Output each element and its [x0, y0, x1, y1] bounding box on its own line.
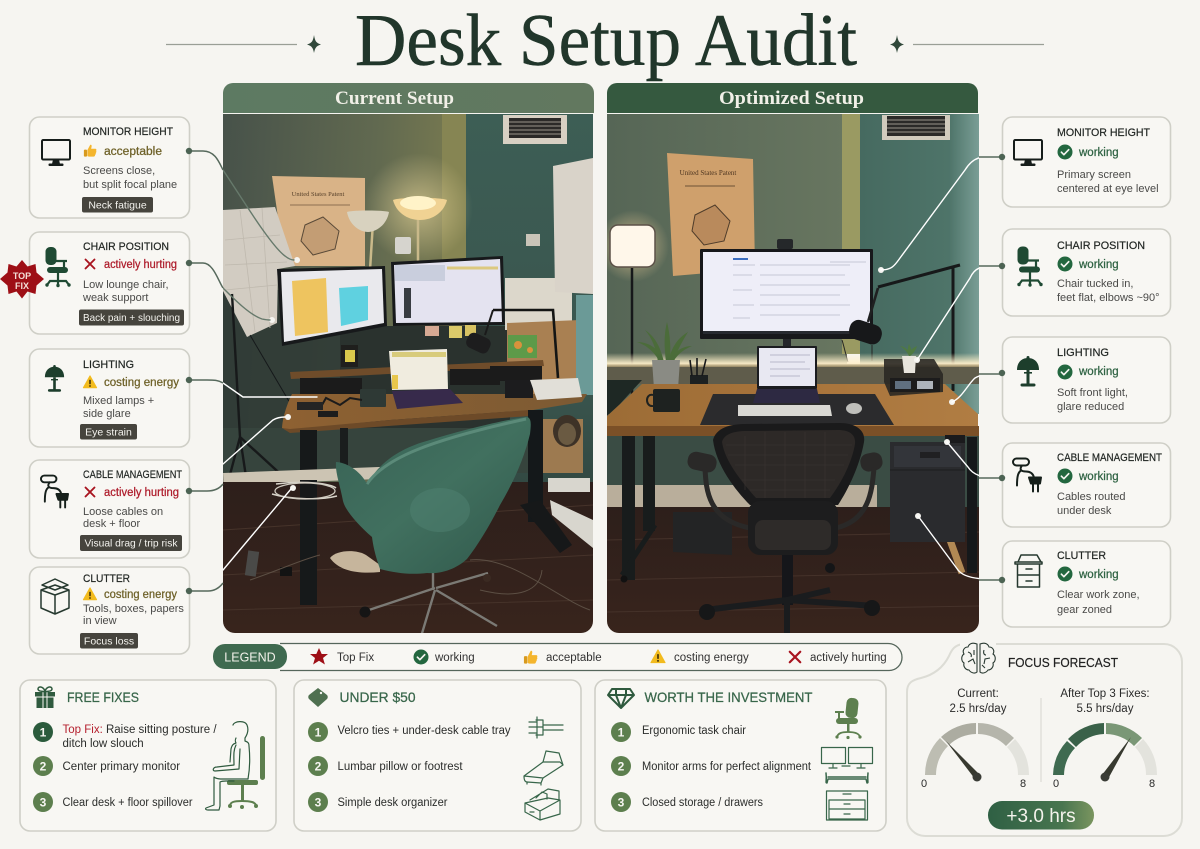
- step 3: [308, 792, 448, 812]
- panel: optimized chair position: [1002, 229, 1170, 316]
- legend: [213, 644, 902, 670]
- legend item: acceptable: [524, 651, 602, 664]
- legend item: working: working: [434, 652, 475, 664]
- panel: optimized setup header: Optimized Setup: [719, 88, 864, 109]
- icon: lamp: [1017, 356, 1039, 386]
- panel: current monitor height: but split focal plane: [83, 179, 177, 191]
- gauge: after top 3 fixes: After Top 3 Fixes:: [1060, 688, 1150, 700]
- step 1: Velcro ties + under-desk cable tray: [338, 725, 511, 737]
- step 2: 2: [618, 760, 625, 774]
- title ornament: left: [166, 35, 321, 53]
- legend item: acceptable: acceptable: [546, 652, 602, 664]
- panel: optimized monitor height: centered at eye level: [1057, 183, 1159, 195]
- panel: current lighting: costing energy: [104, 377, 179, 389]
- gauge: current: 0: [921, 778, 927, 790]
- panel: current cable management: CABLE MANAGEMENT: [83, 469, 182, 481]
- step 2: [33, 756, 180, 776]
- panel: under $50: UNDER $50: [340, 689, 416, 705]
- panel: optimized setup header: [607, 83, 978, 113]
- icon: open box: [41, 579, 69, 614]
- panel: current monitor height: acceptable: [104, 146, 162, 158]
- panel: focus forecast: FOCUS FORECAST: [1008, 656, 1118, 670]
- icon: check: [1058, 256, 1072, 272]
- gauge: current: Current:: [957, 688, 999, 700]
- step 3: Simple desk organizer: [338, 797, 448, 809]
- result pill: [988, 801, 1094, 830]
- panel: current lighting: Mixed lamps +: [83, 395, 154, 407]
- gauge: current: [921, 688, 1029, 790]
- panel: current monitor height: MONITOR HEIGHT: [83, 126, 173, 138]
- panel: current clutter: Tools, boxes, papers: [83, 603, 184, 615]
- panel: optimized clutter: gear zoned: [1057, 604, 1112, 616]
- panel: optimized clutter: [1002, 541, 1170, 627]
- icon: check: [1058, 364, 1072, 380]
- legend item: working: [414, 650, 475, 664]
- panel: current lighting: [30, 349, 190, 447]
- icon: diamond: [608, 689, 634, 708]
- panel: current clutter: [30, 567, 190, 654]
- icon: chair: [45, 247, 71, 287]
- panel: optimized monitor height: Primary screen: [1057, 169, 1131, 181]
- step 1: Top Fix: Raise sitting posture /: [62, 724, 217, 736]
- icon: monitor: [1014, 140, 1042, 166]
- panel: current lighting: LIGHTING: [83, 359, 134, 371]
- panel: worth the investment: WORTH THE INVESTMENT: [644, 689, 813, 705]
- step 1: 1: [315, 726, 322, 740]
- title ornament: right: [890, 35, 1044, 53]
- panel: optimized lighting: glare reduced: [1057, 401, 1124, 413]
- step 1: 1: [40, 726, 47, 740]
- icon: thumbs up: [84, 145, 96, 157]
- photo: optimized setup: [597, 114, 985, 640]
- panel: optimized cable management: CABLE MANAGEMENT: [1057, 452, 1162, 464]
- panel: optimized clutter: CLUTTER: [1057, 550, 1106, 562]
- panel: optimized chair position: CHAIR POSITION: [1057, 240, 1145, 252]
- panel: focus forecast: [907, 640, 1182, 836]
- tag: back pain: Back pain + slouching: [83, 312, 180, 324]
- panel: optimized chair position: feet flat, elbows ~90°: [1057, 292, 1160, 304]
- panel: current setup header: Current Setup: [335, 88, 454, 109]
- icon: monitor: [42, 140, 70, 166]
- tag: visual drag: Visual drag / trip risk: [84, 538, 178, 550]
- gauge: after top 3 fixes: 8: [1149, 778, 1155, 790]
- panel: under $50: [294, 680, 581, 831]
- icon: drawer cabinet: [826, 791, 868, 820]
- step 1: ditch low slouch: [62, 738, 144, 750]
- badge: top fix: FIX: [15, 281, 29, 291]
- tag: neck fatigue: Neck fatigue: [88, 200, 147, 212]
- icon: check: [1058, 468, 1072, 484]
- tag: neck fatigue: [82, 197, 153, 212]
- step 3: 3: [40, 796, 47, 810]
- icon: warning: [83, 588, 97, 600]
- icon: cables: [41, 476, 68, 507]
- panel: current chair position: Low lounge chair,: [83, 279, 169, 291]
- photo: current setup: [223, 114, 593, 640]
- legend label: [213, 644, 287, 669]
- step 3: 3: [618, 796, 625, 810]
- step 1: [611, 722, 746, 742]
- panel: free fixes: FREE FIXES: [67, 689, 139, 705]
- tag: eye strain: Eye strain: [85, 426, 132, 438]
- step 2: Lumbar pillow or footrest: [338, 761, 463, 773]
- tag: focus loss: [80, 633, 138, 648]
- icon: lamp: [45, 365, 64, 392]
- legend item: top fix: Top Fix: [337, 652, 374, 664]
- icon: brain: [962, 643, 995, 673]
- panel: optimized lighting: Soft front light,: [1057, 387, 1128, 399]
- panel: optimized chair position: working: [1078, 259, 1119, 271]
- panel: optimized monitor height: MONITOR HEIGHT: [1057, 127, 1150, 139]
- tag: focus loss: Focus loss: [84, 636, 134, 648]
- photo: optimized setup: United States Patent: [680, 169, 736, 177]
- gauge: after top 3 fixes: 0: [1053, 778, 1059, 790]
- icon: green chair: [835, 697, 862, 739]
- title: Desk Setup Audit: [355, 0, 857, 82]
- panel: current lighting: side glare: [83, 408, 131, 420]
- panel: optimized lighting: working: [1078, 366, 1119, 378]
- step 1: 1: [618, 726, 625, 740]
- legend item: top fix: [310, 648, 374, 664]
- icon: price tag: [308, 688, 328, 707]
- gauge: current: 2.5 hrs/day: [950, 703, 1007, 715]
- panel: current monitor height: [30, 117, 190, 218]
- connector lines: optimized setup: [979, 154, 1005, 583]
- step 2: Center primary monitor: [62, 761, 180, 773]
- icon: warning: [83, 376, 97, 388]
- panel: current clutter: in view: [83, 615, 117, 627]
- panel: optimized chair position: Chair tucked in,: [1057, 278, 1133, 290]
- step 3: [33, 792, 193, 812]
- badge: top fix: TOP: [13, 271, 31, 281]
- panel: free fixes: [20, 680, 276, 831]
- illustration: seated person: [206, 722, 265, 810]
- panel: current cable management: desk + floor: [83, 518, 141, 530]
- panel: optimized clutter: working: [1078, 569, 1119, 581]
- icon: red x: [86, 260, 94, 268]
- legend item: actively hurting: actively hurting: [810, 652, 887, 664]
- panel: current monitor height: Screens close,: [83, 165, 155, 177]
- step 3: Clear desk + floor spillover: [62, 797, 193, 809]
- panel: current clutter: CLUTTER: [83, 573, 130, 585]
- legend item: costing energy: costing energy: [674, 652, 749, 664]
- tag: eye strain: [80, 424, 137, 440]
- tag: visual drag: [80, 535, 182, 551]
- photo: current setup: United States Patent: [292, 191, 345, 198]
- panel: current cable management: Loose cables on: [83, 506, 163, 518]
- icon: monitor arms: [822, 748, 872, 783]
- step 3: Closed storage / drawers: [642, 797, 763, 809]
- panel: current clutter: costing energy: [104, 589, 177, 601]
- panel: current chair position: actively hurting: [104, 259, 177, 271]
- panel: optimized monitor height: [1002, 117, 1170, 207]
- panel: optimized lighting: LIGHTING: [1057, 347, 1109, 359]
- step 3: 3: [315, 796, 322, 810]
- step 3: [611, 792, 763, 812]
- icon: drawers: [1015, 555, 1042, 587]
- panel: current chair position: CHAIR POSITION: [83, 241, 169, 253]
- step 2: [611, 756, 812, 776]
- step 1: [33, 722, 217, 750]
- icon: gift: [35, 687, 55, 708]
- icon: check: [1058, 144, 1072, 160]
- icon: check: [1058, 566, 1072, 582]
- icon: cables: [1013, 458, 1041, 492]
- icon: red x: [86, 488, 94, 496]
- step 2: [308, 756, 463, 776]
- legend label: LEGEND: [224, 650, 276, 664]
- step 1: [308, 722, 511, 742]
- gauge: current: 8: [1020, 778, 1026, 790]
- panel: current setup header: [223, 83, 594, 113]
- step 2: 2: [315, 760, 322, 774]
- badge: top fix: [0, 260, 44, 298]
- panel: current cable management: actively hurting: [104, 487, 179, 499]
- icon: cable tray: [529, 717, 563, 738]
- step 2: Monitor arms for perfect alignment: [642, 761, 812, 773]
- panel: optimized cable management: [1002, 443, 1170, 527]
- panel: optimized lighting: [1002, 337, 1170, 423]
- gauge: after top 3 fixes: [1053, 688, 1157, 790]
- panel: optimized cable management: under desk: [1057, 505, 1112, 517]
- gauge: after top 3 fixes: 5.5 hrs/day: [1077, 703, 1134, 715]
- panel: worth the investment: [595, 680, 886, 831]
- panel: current chair position: [30, 232, 190, 334]
- result pill: +3.0 hrs: [1006, 806, 1076, 827]
- panel: optimized monitor height: working: [1078, 147, 1119, 159]
- icon: chair: [1017, 246, 1043, 287]
- panel: current cable management: [30, 460, 190, 558]
- icon: pillow: [524, 751, 563, 785]
- icon: organizer box: [525, 789, 560, 820]
- panel: optimized cable management: working: [1078, 471, 1119, 483]
- connector lines: current setup: [186, 148, 223, 594]
- step 2: 2: [40, 760, 47, 774]
- panel: optimized cable management: Cables routed: [1057, 491, 1126, 503]
- legend item: costing energy: [651, 650, 749, 664]
- panel: current chair position: weak support: [82, 292, 148, 304]
- step 1: Ergonomic task chair: [642, 725, 746, 737]
- panel: optimized clutter: Clear work zone,: [1057, 589, 1140, 601]
